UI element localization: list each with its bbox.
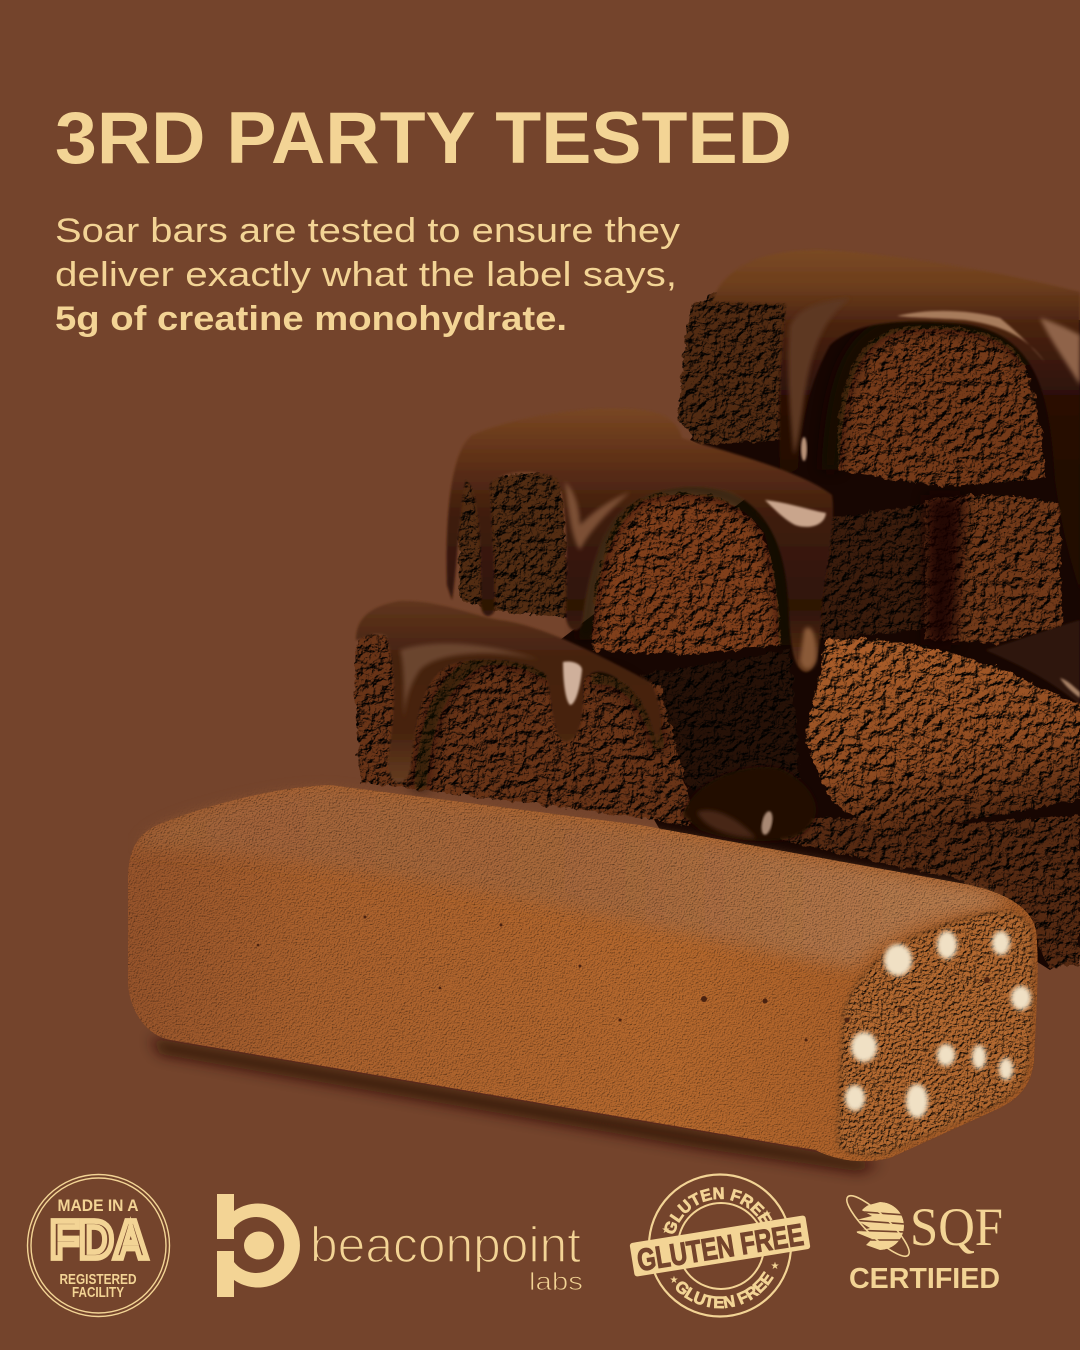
- middle brownie: end section: [456, 470, 572, 618]
- bar shadow: [150, 1038, 880, 1172]
- badge: FDA registered facility: FACILITY: [72, 1285, 124, 1301]
- logo: beaconpoint labs: labs: [529, 1268, 583, 1296]
- bottom glaze: [356, 601, 661, 783]
- badge: gluten free stamp: ★: [771, 1261, 780, 1272]
- badge: gluten free stamp: GLUTEN FREE: [635, 1217, 806, 1278]
- bar side face: [128, 785, 1038, 1161]
- logo: SQF certified: [846, 1194, 1002, 1288]
- badge: FDA registered facility: [28, 1174, 170, 1316]
- dark shadow mass behind brownies: [560, 320, 1080, 970]
- bar end face: [836, 910, 1036, 1157]
- top brownie: end section: [678, 293, 790, 445]
- photo: protein bar: [128, 785, 1038, 1172]
- body text: Soar bars are tested to ensure they: [55, 212, 681, 250]
- title: 3RD PARTY TESTED: [55, 98, 792, 179]
- lower right brownie: [780, 815, 1080, 968]
- middle glaze highlights: [565, 482, 826, 669]
- right brownie block, lit: [805, 638, 1080, 835]
- top glaze: [712, 250, 1080, 590]
- body text: deliver exactly what the label says,: [55, 256, 677, 294]
- rear brownie block, bottom row: [640, 650, 800, 790]
- glaze run at right edge: [985, 620, 1080, 705]
- badge: FDA registered facility: REGISTERED: [60, 1272, 136, 1288]
- logo: SQF certified: SQF: [910, 1197, 1003, 1257]
- badge: gluten free stamp: ★: [662, 1225, 671, 1236]
- top glaze highlights: [788, 298, 1080, 461]
- badge: gluten free stamp: ★: [763, 1209, 772, 1220]
- badge: gluten free stamp: [630, 1173, 810, 1318]
- badge: FDA registered facility: FDA: [50, 1210, 148, 1270]
- top brownie: front cut face: [838, 326, 1045, 487]
- badge: FDA registered facility: MADE IN A: [58, 1197, 139, 1215]
- body text: 5g of creatine monohydrate.: [55, 300, 567, 338]
- logo mark: [217, 1194, 300, 1297]
- rear brownie block, middle row: [812, 505, 925, 640]
- bar body: [128, 785, 1038, 1161]
- cream filling dots: [845, 931, 1031, 1118]
- badge: gluten free stamp: GLUTEN FREE: [664, 1187, 772, 1234]
- surface pits: [257, 916, 990, 1042]
- logo: SQF certified: CERTIFIED: [849, 1263, 1000, 1295]
- photo: stack of chocolate brownies with glaze: [354, 250, 1080, 970]
- body text: [55, 212, 681, 338]
- bottom brownie body: [354, 632, 690, 826]
- middle glaze: [447, 409, 833, 672]
- chocolate puddle: [682, 767, 816, 841]
- bottom arch shading: [420, 659, 660, 790]
- shade on left of right block: [925, 495, 965, 645]
- right brownie block, middle row: [925, 494, 1062, 643]
- middle cut face shading: [585, 488, 785, 645]
- globe icon: [846, 1194, 910, 1258]
- logo: beaconpoint labs: beaconpoint: [310, 1217, 581, 1273]
- logo: beaconpoint labs: [217, 1194, 583, 1297]
- bar top face: [134, 787, 1010, 968]
- bottom glaze highlights: [400, 643, 582, 720]
- badge: gluten free stamp: ★: [670, 1275, 679, 1286]
- top cut face shading: [830, 320, 1032, 470]
- badge: gluten free stamp: GLUTEN FREE: [676, 1271, 774, 1308]
- middle brownie: front cut face: [592, 493, 780, 655]
